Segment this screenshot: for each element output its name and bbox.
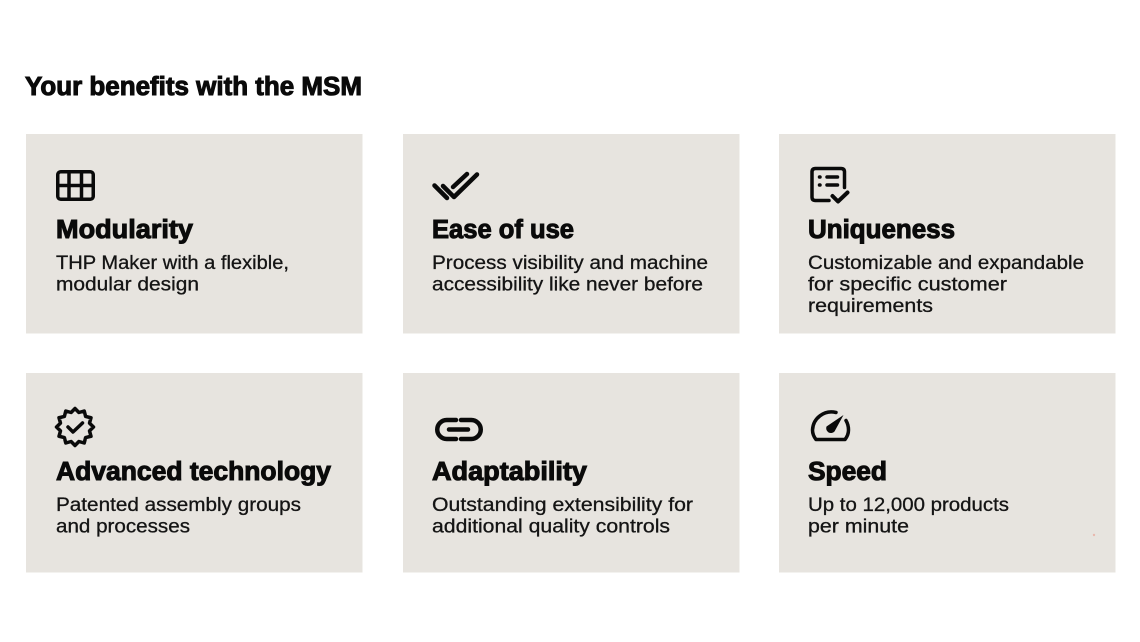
- text: ease of use: accessibility like never before: [432, 274, 703, 296]
- icon: grid: [58, 172, 93, 199]
- icon: double check: [434, 174, 477, 198]
- icon: speedometer: [812, 412, 849, 440]
- text: uniqueness: requirements: [808, 295, 933, 317]
- heading: modularity: Modularity: [56, 216, 194, 244]
- text: advanced technology: and processes: [56, 516, 190, 538]
- panel: ease of use: [403, 134, 740, 334]
- text: uniqueness: Customizable and expandable: [808, 252, 1084, 274]
- text: speed: Up to 12,000 products: [808, 494, 1009, 516]
- panel: uniqueness: [779, 134, 1116, 334]
- heading: adaptability: Adaptability: [432, 458, 588, 486]
- text: modularity: THP Maker with a flexible,: [56, 252, 289, 274]
- panel: advanced technology: [26, 373, 362, 572]
- heading: uniqueness: Uniqueness: [808, 216, 955, 244]
- text: ease of use: Process visibility and machine: [432, 252, 708, 274]
- panel: adaptability: [403, 373, 740, 572]
- title: Your benefits with the MSM: [25, 73, 362, 101]
- text: modularity: modular design: [56, 274, 199, 296]
- heading: advanced technology: Advanced technology: [56, 458, 332, 486]
- heading: speed: Speed: [808, 458, 887, 486]
- text: speed: per minute: [808, 516, 909, 538]
- text: adaptability: Outstanding extensibility for: [432, 494, 694, 516]
- panel: modularity: [26, 134, 362, 334]
- icon: checklist: [812, 168, 848, 202]
- text: adaptability: additional quality controls: [432, 516, 670, 538]
- icon: badge check: [56, 408, 94, 446]
- heading: ease of use: Ease of use: [432, 216, 574, 244]
- text: advanced technology: Patented assembly groups: [56, 494, 301, 516]
- icon: link: [437, 420, 481, 439]
- text: uniqueness: for specific customer: [808, 274, 1008, 296]
- panel: speed: [779, 373, 1116, 572]
